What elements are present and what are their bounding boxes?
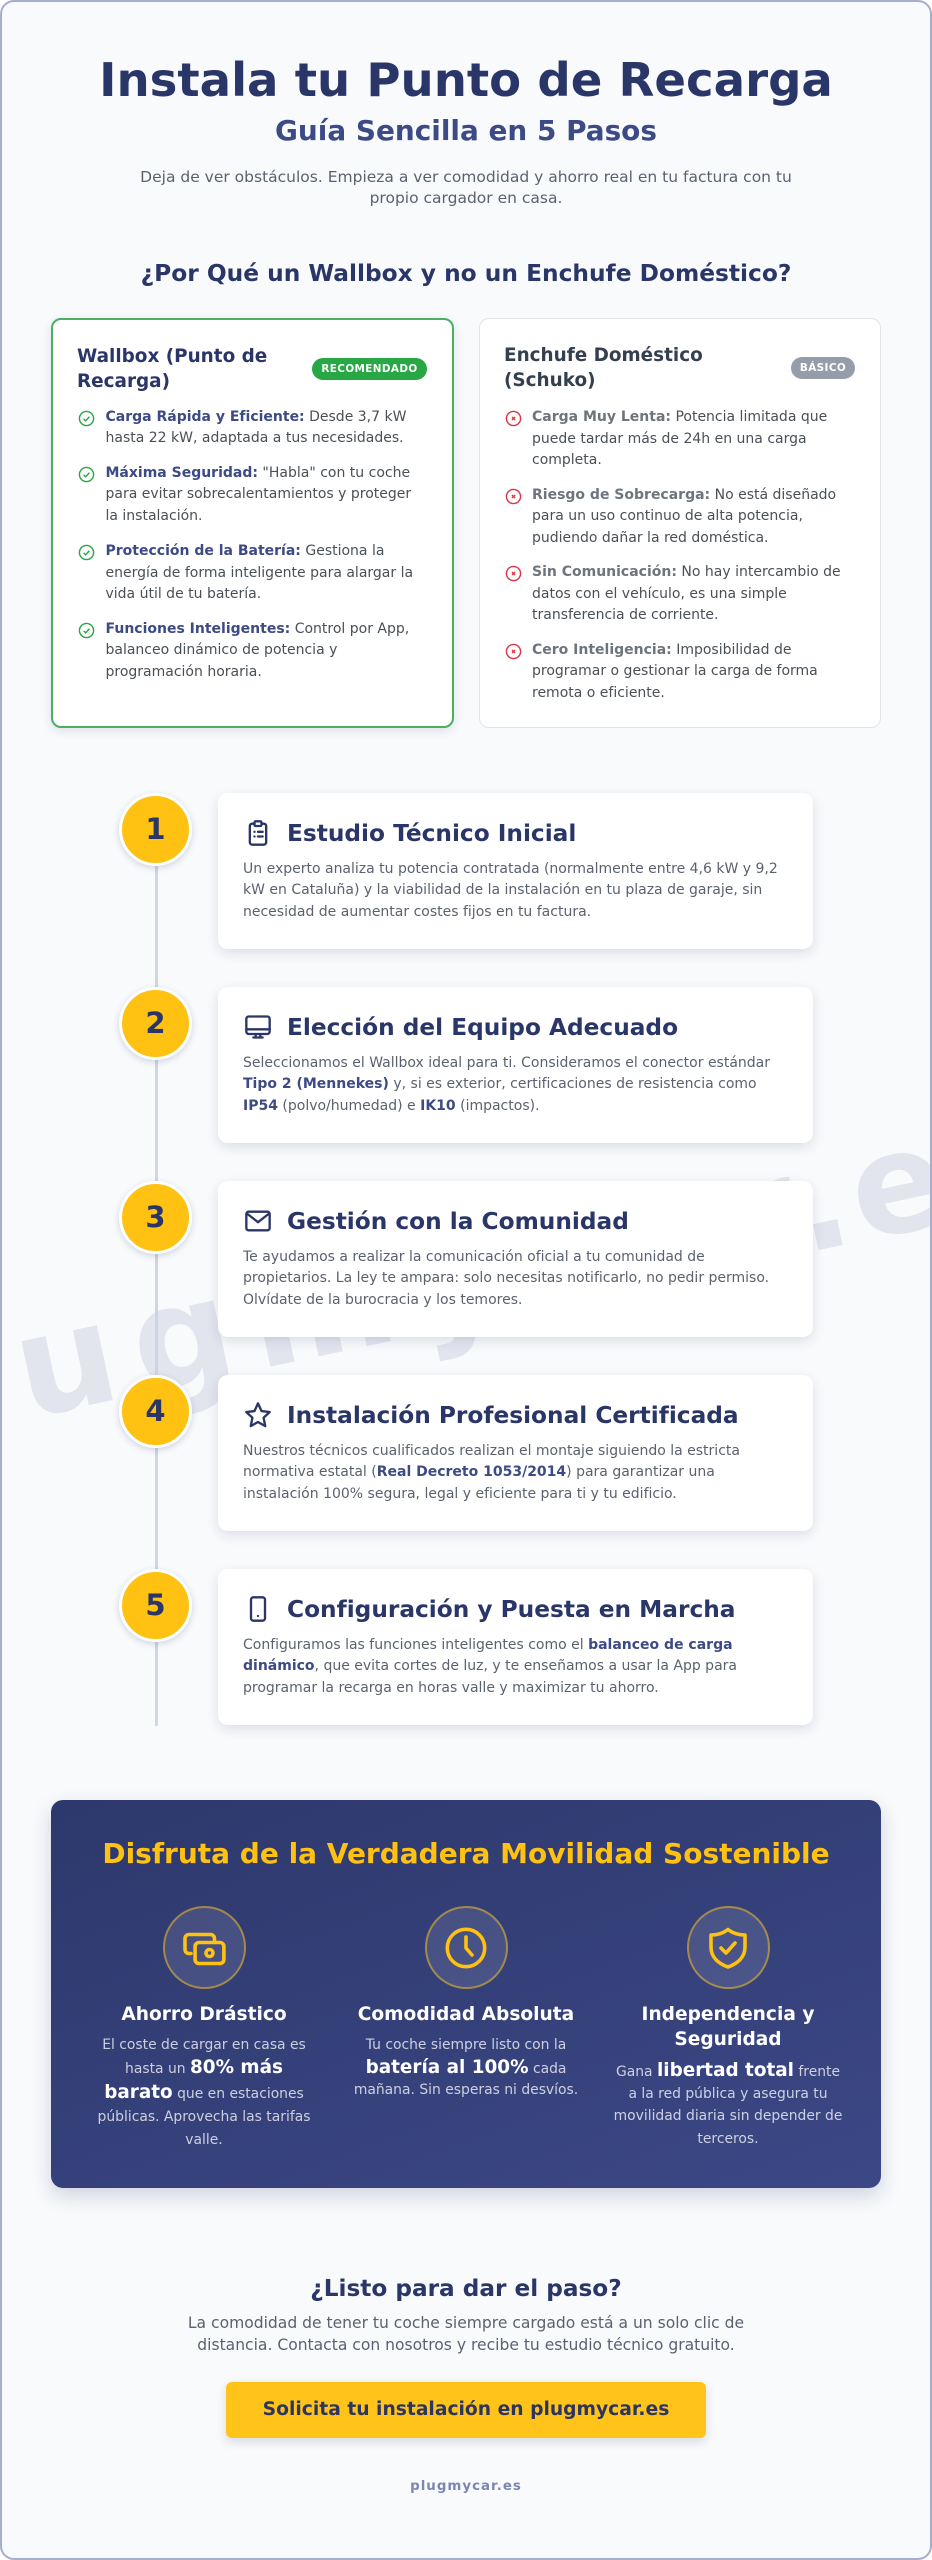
benefit column: independencia: movilidad diaria sin depender de xyxy=(614,2108,842,2124)
step 1 text xyxy=(243,860,778,920)
step number 3: 3 xyxy=(145,1200,166,1234)
benefit column: ahorro: públicas. Aprovecha las tarifas xyxy=(98,2109,310,2125)
benefit column: ahorro: El coste de cargar en casa es xyxy=(102,2037,306,2053)
step 3 heading: Gestión con la Comunidad xyxy=(287,1208,629,1234)
intro text: Deja de ver obstáculos. Empieza a ver comodidad y ahorro real en tu factura con tu xyxy=(140,168,792,186)
step number 1: 1 xyxy=(145,812,166,846)
benefit column: ahorro: barato que en estaciones xyxy=(104,2082,304,2103)
step 4 text: Nuestros técnicos cualificados realizan el montaje siguiendo la estricta xyxy=(243,1442,740,1458)
step 2 text: Tipo 2 (Mennekes) y, si es exterior, certificaciones de resistencia como xyxy=(243,1076,757,1092)
benefit: carga rapida: Carga Rápida y Eficiente: Desde 3,7 kW xyxy=(106,408,406,424)
benefit column: comodidad: Tu coche siempre listo con la xyxy=(366,2037,566,2053)
step 4 text: instalación 100% segura, legal y eficiente para ti y tu edificio. xyxy=(243,1486,677,1502)
benefit: bateria: energía de forma inteligente para alargar la xyxy=(106,565,413,581)
subtitle: Guía Sencilla en 5 Pasos xyxy=(275,114,657,147)
step number 5 xyxy=(119,1569,192,1642)
benefit column: comodidad xyxy=(354,2004,578,2098)
step card 2 xyxy=(218,987,813,1143)
icon: shield xyxy=(686,1906,770,1989)
drawback: sin comunicacion xyxy=(506,564,841,623)
drawback: sin comunicacion: transferencia de corriente. xyxy=(532,607,718,623)
cta button: Solicita tu instalación en plugmycar.es xyxy=(263,2399,669,2420)
badge: recomendado: RECOMENDADO xyxy=(321,363,418,375)
icon: envelope xyxy=(245,1210,271,1232)
benefit: seguridad xyxy=(78,464,412,524)
step 2 text: Seleccionamos el Wallbox ideal para ti. Consideramos el conector estándar xyxy=(243,1054,770,1070)
step 3 text: propietarios. La ley te ampara: solo necesitas notificarlo, no pedir permiso. xyxy=(243,1270,769,1286)
step number 1 xyxy=(119,793,192,866)
schuko heading xyxy=(504,345,703,391)
drawback: sin comunicacion: Sin Comunicación: No hay intercambio de xyxy=(532,564,841,580)
wallbox heading: Wallbox (Punto de xyxy=(77,346,267,367)
step card 4 xyxy=(218,1375,813,1531)
benefit: carga rapida xyxy=(78,408,406,446)
drawback: sobrecarga: para un uso continuo de alta potencia, xyxy=(532,508,803,524)
icon: star xyxy=(245,1402,271,1428)
drawback: sobrecarga: pudiendo dañar la red doméstica. xyxy=(532,530,768,546)
benefit: bateria: vida útil de tu batería. xyxy=(106,586,261,602)
benefit: funciones xyxy=(78,620,409,680)
step number 2 xyxy=(119,987,192,1060)
schuko heading: Enchufe Doméstico xyxy=(504,345,703,366)
step 3 text: Te ayudamos a realizar la comunicación oficial a tu comunidad de xyxy=(243,1248,705,1264)
wallbox heading xyxy=(77,346,267,392)
drawback: cero inteligencia: remota o eficiente. xyxy=(532,685,665,701)
benefit column: independencia: terceros. xyxy=(697,2131,759,2147)
badge: recomendado xyxy=(312,358,427,380)
step number 5: 5 xyxy=(145,1588,166,1622)
step 5 text: Configuramos las funciones inteligentes como el balanceo de carga xyxy=(243,1636,733,1652)
step 4 text xyxy=(243,1442,740,1502)
icon: monitor xyxy=(245,1015,271,1039)
cta heading: ¿Listo para dar el paso? xyxy=(310,2275,622,2302)
step 1 text: necesidad de aumentar costes fijos en tu factura. xyxy=(243,904,591,920)
badge: basico: BÁSICO xyxy=(800,362,846,374)
step 5 text: programar la recarga en horas valle y maximizar tu ahorro. xyxy=(243,1680,659,1696)
panel: wallbox xyxy=(51,318,454,728)
step number 4: 4 xyxy=(145,1394,166,1428)
benefit column: comodidad: mañana. Sin esperas ni desvíos. xyxy=(354,2082,578,2098)
benefit column: comodidad: batería al 100% cada xyxy=(366,2057,566,2078)
icon: phone xyxy=(250,1596,266,1622)
wallbox heading: Recarga) xyxy=(77,371,170,392)
benefit column: ahorro: Ahorro Drástico xyxy=(121,2004,287,2025)
icon: clock xyxy=(424,1906,508,1989)
benefit: bateria: Protección de la Batería: Gestiona la xyxy=(106,543,384,559)
drawback: cero inteligencia: Cero Inteligencia: Imposibilidad de xyxy=(532,642,791,658)
section heading: ¿Por Qué un Wallbox y no un Enchufe Doméstico? xyxy=(141,260,791,286)
benefit column: independencia: a la red pública y asegura tu xyxy=(628,2086,828,2102)
badge: basico xyxy=(791,357,855,379)
schuko heading: (Schuko) xyxy=(504,370,596,391)
icon: clipboard xyxy=(248,820,268,846)
title: Instala tu Punto de Recarga xyxy=(99,53,833,107)
benefit column: independencia: Seguridad xyxy=(674,2029,782,2050)
intro text: propio cargador en casa. xyxy=(370,189,562,207)
step 2 text: IP54 (polvo/humedad) e IK10 (impactos). xyxy=(243,1098,540,1114)
benefit column: comodidad: Comodidad Absoluta xyxy=(358,2004,574,2025)
step card 3 xyxy=(218,1181,813,1337)
step 1 heading: Estudio Técnico Inicial xyxy=(287,820,576,846)
drawback: carga lenta xyxy=(506,409,827,468)
step 5 text: dinámico, que evita cortes de luz, y te enseñamos a usar la App para xyxy=(243,1658,737,1674)
benefit column: ahorro: hasta un 80% más xyxy=(125,2057,283,2078)
drawback: carga lenta: puede tardar más de 24h en una carga xyxy=(532,431,807,447)
step 4 heading: Instalación Profesional Certificada xyxy=(287,1402,739,1428)
step 2 heading: Elección del Equipo Adecuado xyxy=(287,1014,678,1040)
benefit column: ahorro: valle. xyxy=(185,2132,223,2148)
step number 2: 2 xyxy=(145,1006,166,1040)
benefit column: independencia: Independencia y xyxy=(642,2004,814,2025)
drawback: cero inteligencia: programar o gestionar la carga de forma xyxy=(532,663,818,679)
step 2 text xyxy=(243,1054,770,1114)
footer brand: plugmycar.es xyxy=(410,2479,522,2494)
step 1 text: kW en Cataluña) y la viabilidad de la instalación en tu plaza de garaje, sin xyxy=(243,882,762,898)
drawback: cero inteligencia xyxy=(506,642,818,701)
benefit: seguridad: la instalación. xyxy=(106,508,202,524)
step 3 text: Olvídate de la burocracia y los temores. xyxy=(243,1292,522,1308)
step 3 text xyxy=(242,1248,769,1308)
step number 4 xyxy=(119,1375,192,1448)
benefit: seguridad: para evitar sobrecalentamientos y proteger xyxy=(106,486,411,502)
cta text: distancia. Contacta con nosotros y recibe tu estudio técnico gratuito. xyxy=(197,2336,735,2354)
step 5 heading: Configuración y Puesta en Marcha xyxy=(287,1596,735,1622)
drawback: carga lenta: Carga Muy Lenta: Potencia limitada que xyxy=(532,409,827,425)
timeline line xyxy=(155,830,158,1726)
benefit: funciones: Funciones Inteligentes: Control por App, xyxy=(106,620,409,636)
drawback: sin comunicacion: datos con el vehículo, es una simple xyxy=(532,586,787,602)
cta button xyxy=(226,2382,706,2438)
benefit column: independencia: Gana libertad total frente xyxy=(616,2060,840,2081)
step card 1 xyxy=(218,793,813,949)
benefit column: independencia xyxy=(614,2004,842,2147)
drawback: carga lenta: completa. xyxy=(532,452,602,468)
intro text xyxy=(140,168,792,207)
panel: benefits xyxy=(51,1800,881,2188)
drawback: sobrecarga: Riesgo de Sobrecarga: No está diseñado xyxy=(532,486,836,502)
cta text: La comodidad de tener tu coche siempre cargado está a un solo clic de xyxy=(188,2314,744,2332)
benefit: funciones: programación horaria. xyxy=(106,664,262,680)
step card 5 xyxy=(218,1569,813,1725)
benefit: bateria xyxy=(78,543,413,602)
step 1 text: Un experto analiza tu potencia contratada (normalmente entre 4,6 kW y 9,2 xyxy=(243,860,778,876)
step number 3 xyxy=(119,1181,192,1254)
icon: money xyxy=(162,1906,246,1989)
benefit: funciones: balanceo dinámico de potencia y xyxy=(106,642,337,658)
benefits heading: Disfruta de la Verdadera Movilidad Sostenible xyxy=(102,1836,830,1870)
cta text xyxy=(188,2314,744,2354)
benefit column: ahorro xyxy=(98,2004,310,2148)
step 4 text: normativa estatal (Real Decreto 1053/2014) para garantizar una xyxy=(243,1464,715,1480)
drawback: sobrecarga xyxy=(506,486,836,546)
step 5 text xyxy=(243,1636,737,1696)
panel: schuko xyxy=(479,318,881,728)
benefit: carga rapida: hasta 22 kW, adaptada a tus necesidades. xyxy=(106,430,404,446)
benefit: seguridad: Máxima Seguridad: "Habla" con tu coche xyxy=(106,464,410,480)
